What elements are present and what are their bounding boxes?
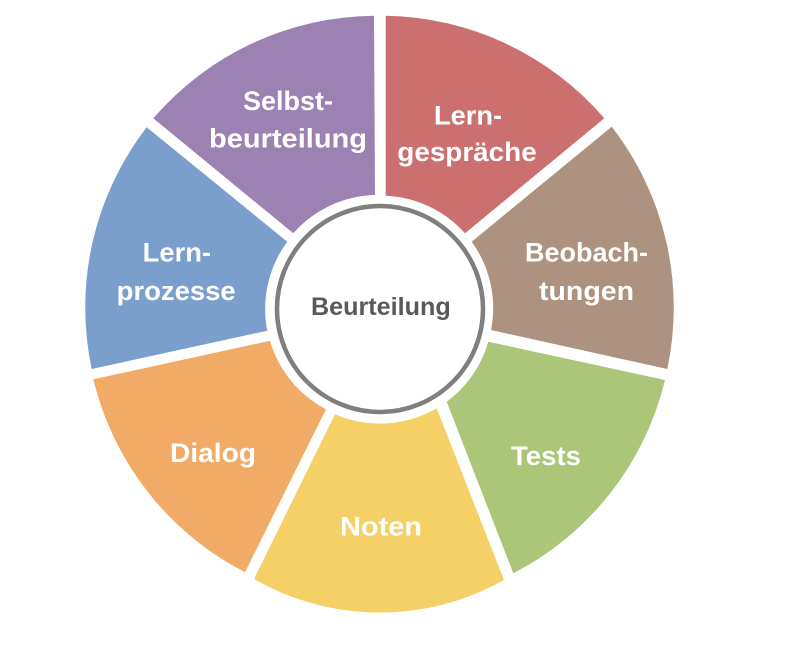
- segment: Lernprozesse: prozesse: [117, 276, 236, 306]
- segment: Beobachtungen: tungen: [539, 276, 634, 306]
- segment: Lerngespräche: gespräche: [397, 137, 537, 167]
- segment: Lernprozesse: Lern-: [143, 238, 211, 268]
- segment: Tests: [447, 342, 665, 573]
- center circle: Beurteilung: [277, 206, 483, 412]
- segment: Beobachtungen: [472, 127, 674, 369]
- segment: Selbstbeurteilung: Selbst-: [243, 86, 333, 116]
- segment: Noten: Noten: [340, 512, 422, 542]
- segment: Noten: [254, 408, 504, 613]
- segment: Dialog: [93, 341, 326, 572]
- segment: Beobachtungen: Beobach-: [525, 238, 648, 268]
- segment: Selbstbeurteilung: beurteilung: [209, 124, 367, 154]
- segment: Lerngespräche: Lern-: [434, 100, 502, 130]
- segment: Lerngespräche: [386, 16, 604, 233]
- segment: Lernprozesse: [85, 127, 287, 369]
- center circle: Beurteilung: Beurteilung: [311, 293, 451, 321]
- segment: Dialog: Dialog: [170, 438, 256, 468]
- segment: Selbstbeurteilung: [153, 16, 375, 233]
- segment: Tests: Tests: [511, 441, 581, 471]
